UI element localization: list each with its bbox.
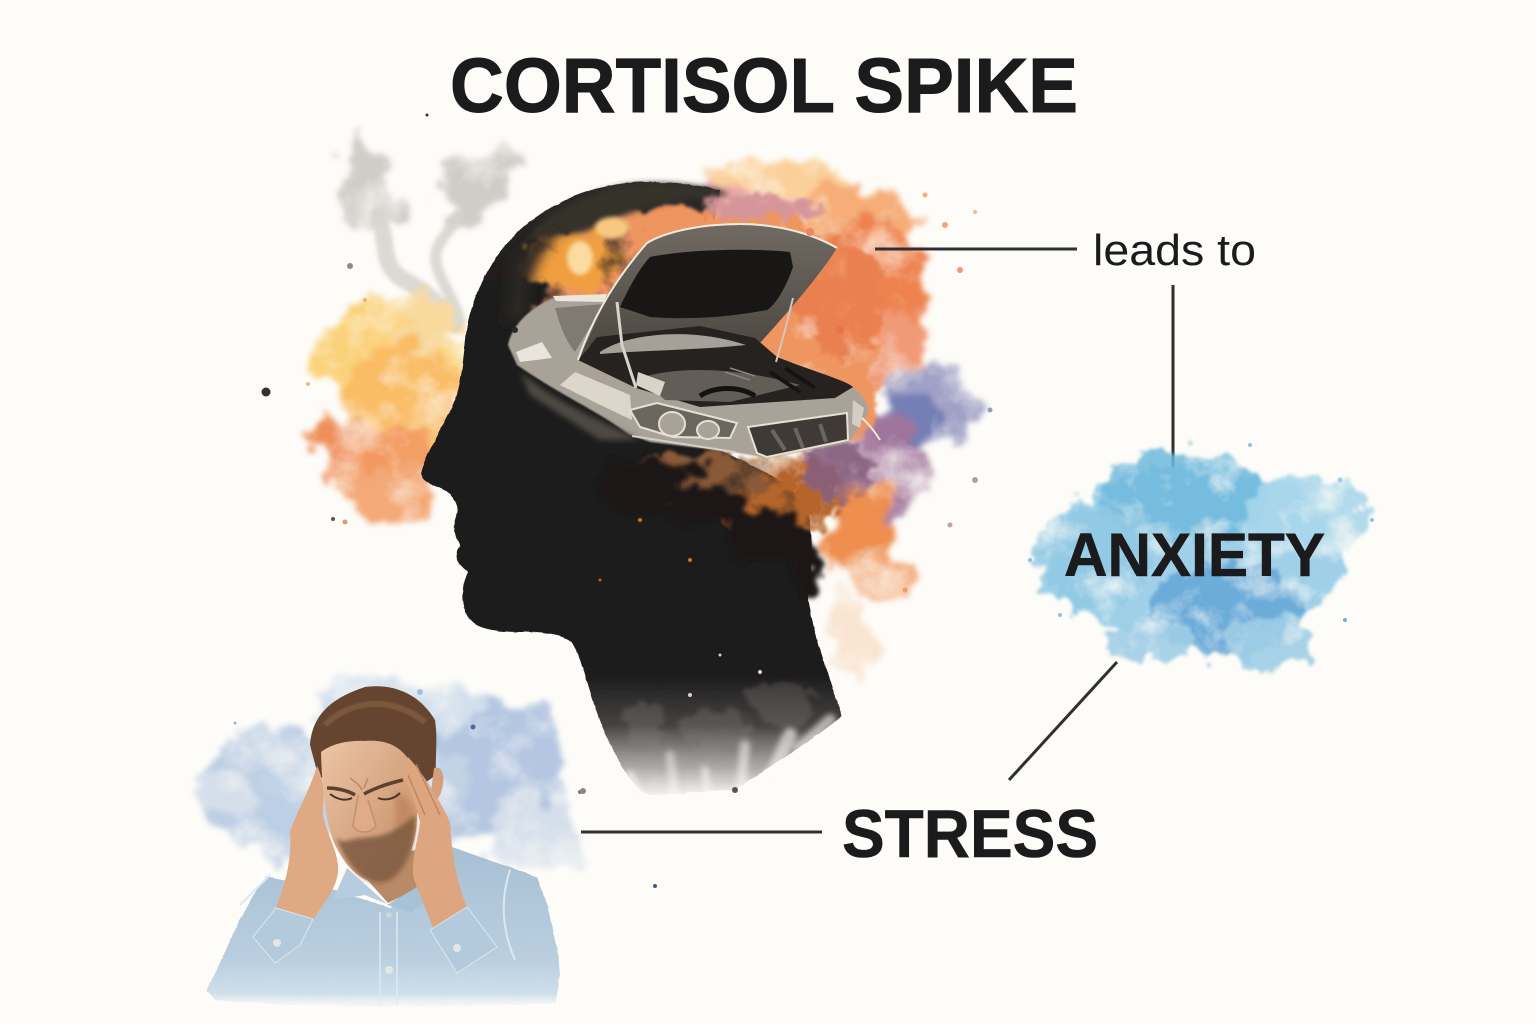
dark mottling under car: [598, 455, 819, 599]
neck drips and wash: [625, 681, 830, 800]
connector line: anxiety to stress: [1009, 662, 1117, 780]
ear: [428, 768, 443, 815]
beard: [336, 815, 415, 883]
windshield reflection in bay: [600, 334, 746, 354]
head silhouette: [421, 182, 842, 795]
rust patch below car: [630, 440, 874, 539]
watercolor blob behind man: [193, 679, 585, 872]
right eye: [378, 793, 400, 799]
placket: [380, 912, 397, 1005]
label: leads to: leads to: [1093, 226, 1256, 275]
label: stress: STRESS: [842, 796, 1098, 872]
headlight right lens: [697, 421, 719, 439]
windshield: [555, 304, 604, 352]
forehead crease: [350, 778, 368, 790]
right cuff: [430, 907, 497, 973]
left hand: [276, 766, 338, 920]
left brow: [327, 788, 355, 795]
title: CORTISOL SPIKE: [450, 43, 1078, 129]
small specks near man: [234, 689, 657, 888]
right hand: [403, 757, 467, 928]
left cuff: [253, 908, 313, 963]
connector line: stress to man: [581, 830, 822, 834]
connector line: leads to to anxiety: [1172, 285, 1174, 468]
watercolor splash: orange and purple right: [675, 161, 976, 671]
head interior colour wash: [505, 183, 884, 539]
engine parts: [640, 370, 800, 402]
ink and paint splatter around head: [262, 114, 992, 794]
car body: [508, 295, 868, 458]
shirt: [207, 847, 560, 1006]
left cuff button: [273, 939, 281, 947]
connector line: cortisol spike to leads to: [875, 248, 1077, 250]
car with open hood: [508, 224, 880, 458]
hair: [310, 686, 436, 790]
headlight: [630, 403, 737, 438]
right brow: [364, 780, 403, 794]
grille: [748, 413, 848, 457]
raised hood: [578, 225, 837, 360]
shirt button upper: [386, 912, 392, 918]
shirt button lower: [385, 966, 393, 974]
headlight left lens: [659, 412, 685, 436]
watercolor splash: yellow and orange left: [306, 294, 473, 518]
right cuff button: [453, 944, 461, 952]
collar: [333, 868, 387, 904]
sleeve seams: [240, 870, 515, 960]
hood underside: [620, 250, 793, 318]
neck: [345, 850, 425, 903]
watercolor blob: anxiety: [1028, 443, 1374, 668]
engine bay: [578, 326, 853, 407]
hood struts: [617, 302, 636, 388]
label: anxiety: ANXIETY: [1064, 521, 1325, 589]
finger lines: [408, 764, 440, 815]
man holding his head: [207, 686, 560, 1006]
left eye: [330, 794, 352, 800]
hood edge highlight: [578, 224, 837, 360]
mouth: [350, 845, 382, 848]
face: [321, 741, 418, 883]
cheek shadow: [395, 790, 415, 840]
nose: [353, 795, 376, 832]
smoke: [340, 143, 520, 325]
